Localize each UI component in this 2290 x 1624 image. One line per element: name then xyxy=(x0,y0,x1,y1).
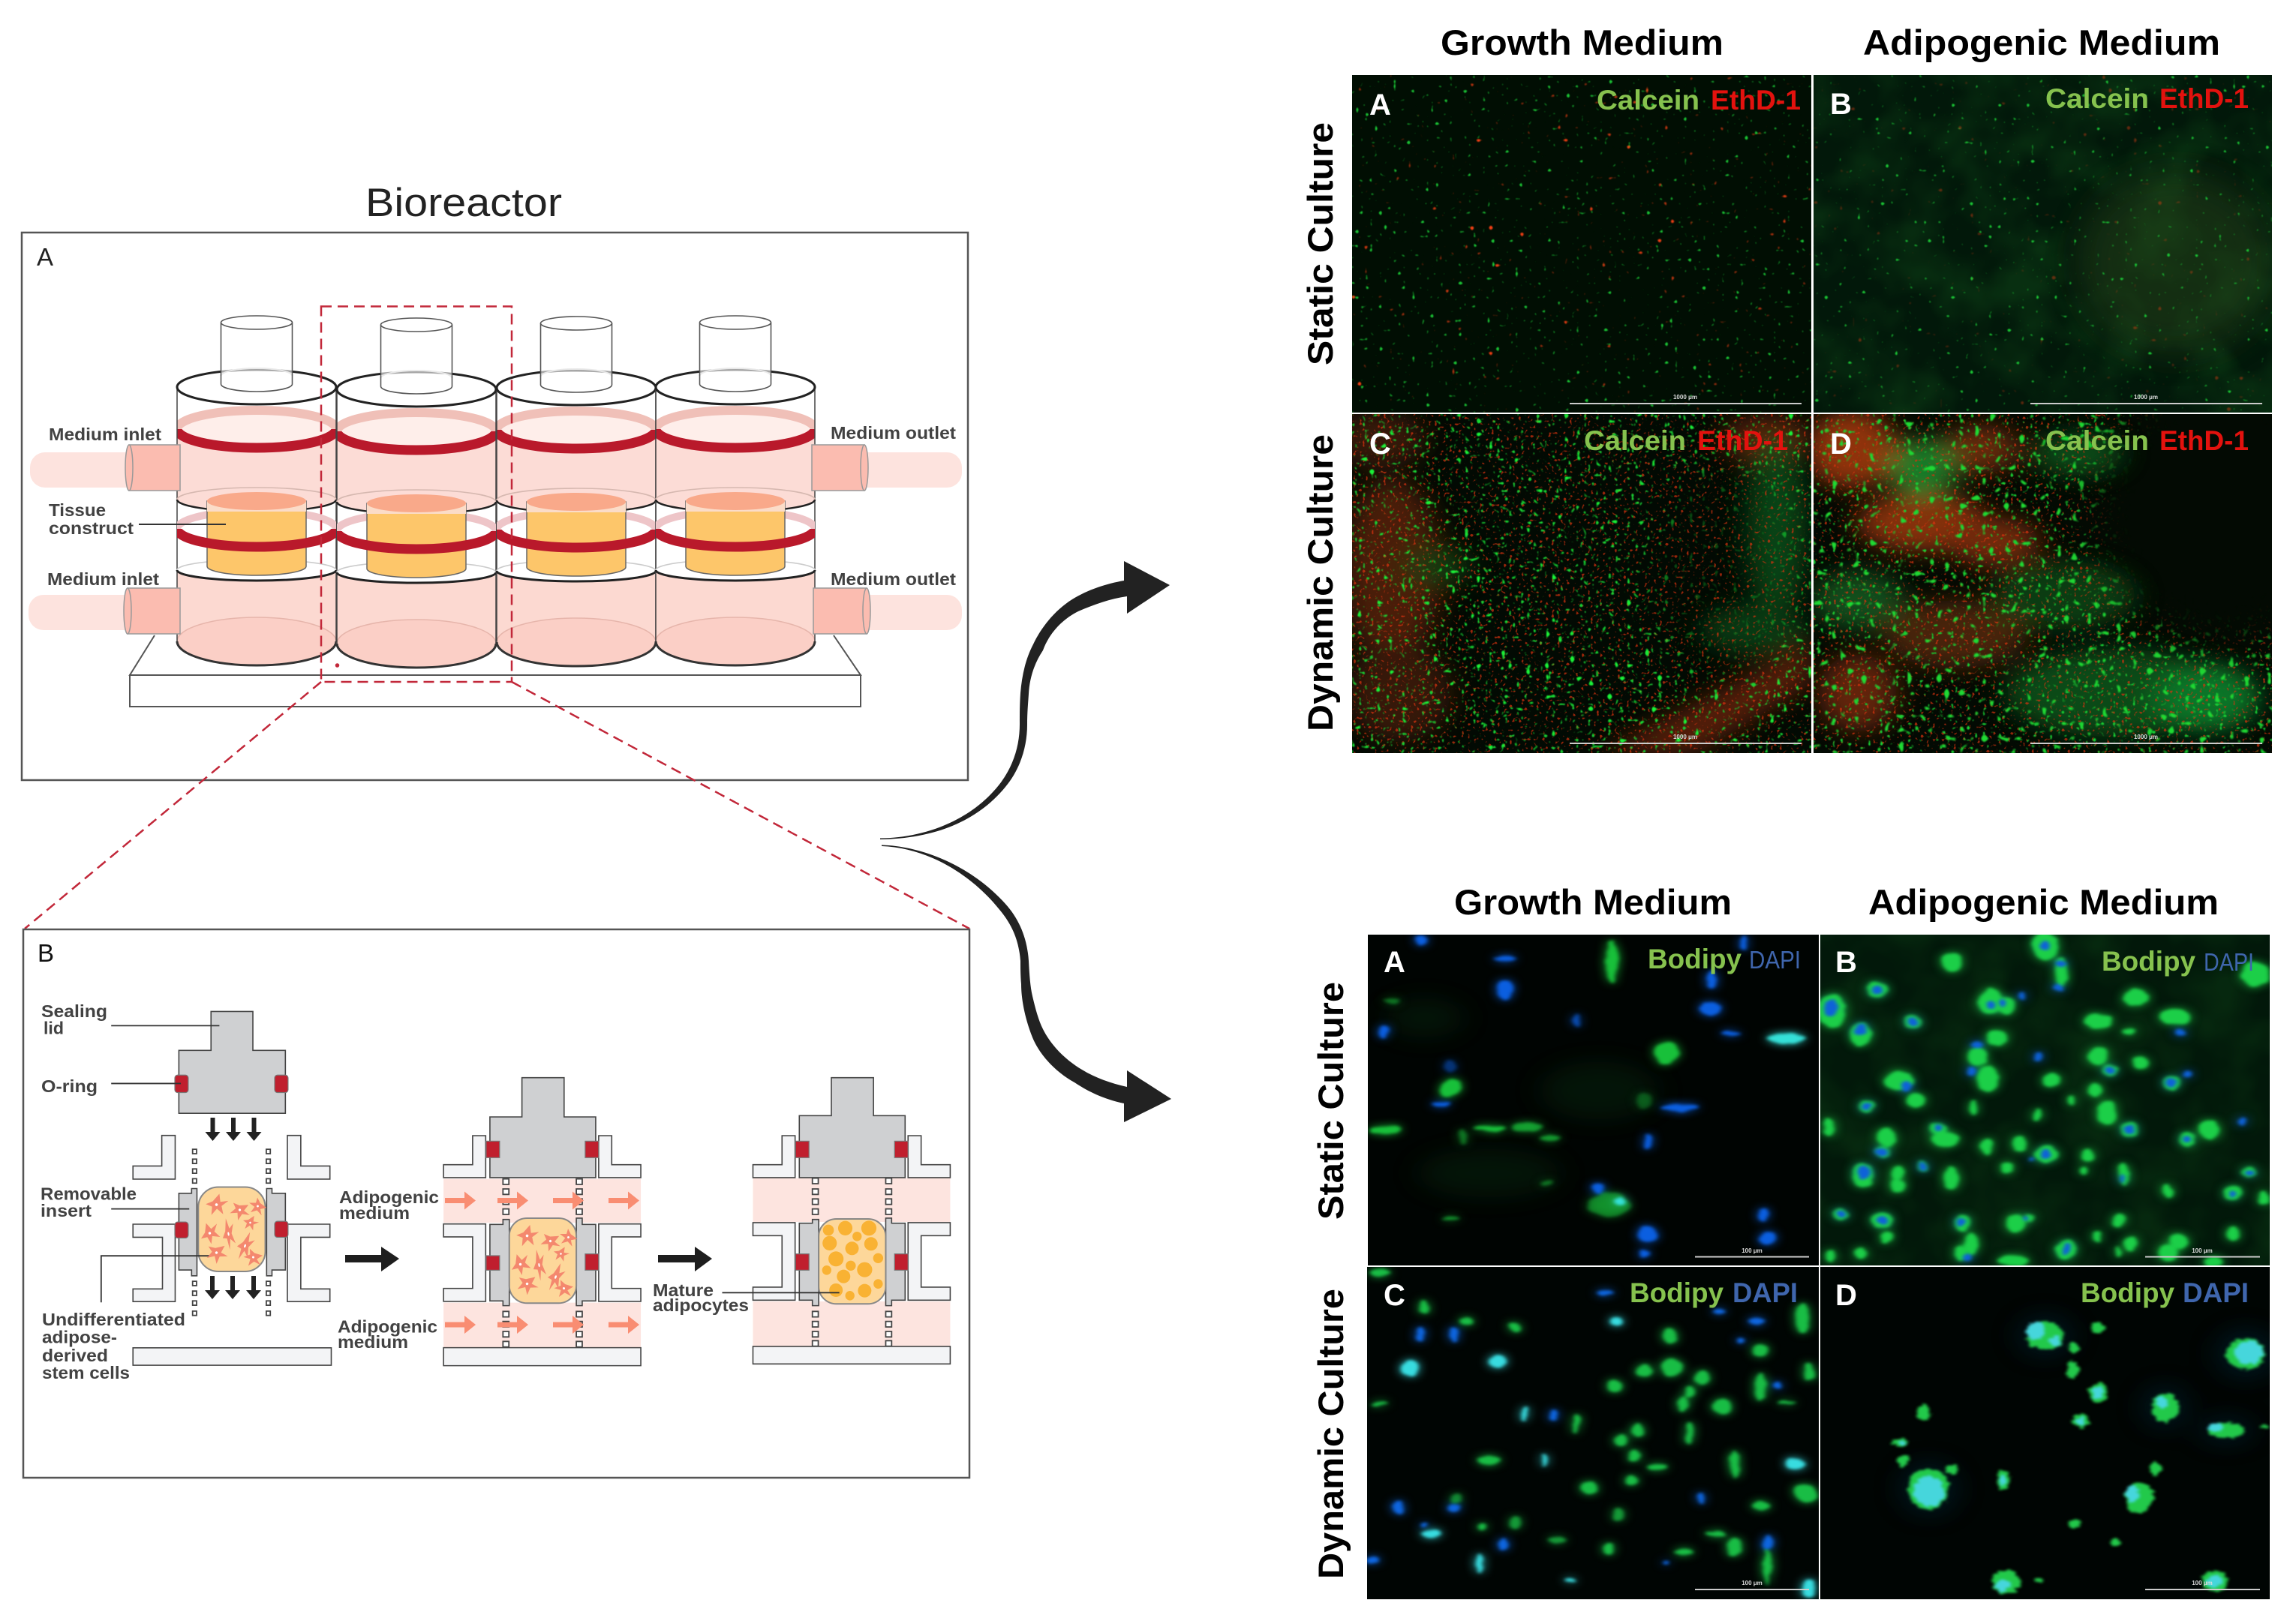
label: mature adipocytes xyxy=(653,1280,749,1315)
micrograph A: static growth medium, calcein/EthD-1: A xyxy=(1369,89,1391,122)
cylinder 1 xyxy=(177,316,336,665)
micrograph D: dynamic adipogenic medium, calcein/EthD-1: 1000 μm xyxy=(2134,734,2158,740)
panel B: construct stages xyxy=(23,929,969,1478)
micrograph A: static growth medium, calcein/EthD-1: Calcein xyxy=(1597,85,1699,116)
base plate xyxy=(130,635,861,707)
label: mature adipocytes: Mature xyxy=(653,1280,714,1300)
micrograph C: dynamic growth medium, Bodipy/DAPI: 100 μm xyxy=(1742,1580,1763,1586)
label: medium outlet lower: Medium outlet xyxy=(831,569,956,589)
label: medium outlet upper: Medium outlet xyxy=(831,423,956,443)
label: medium inlet lower: Medium inlet xyxy=(47,569,159,589)
labels stage 1: Removable xyxy=(41,1184,137,1203)
labels stage 1: Sealing xyxy=(41,1001,107,1021)
labels stage 1: O-ring xyxy=(41,1076,98,1096)
micrograph B: static adipogenic medium, calcein/EthD-1: B xyxy=(1830,88,1852,121)
micrograph B: static adipogenic medium, calcein/EthD-1: EthD-1 xyxy=(2159,83,2249,114)
micrograph A: static growth medium, Bodipy/DAPI xyxy=(1368,935,1819,1265)
panel A: bioreactor array xyxy=(22,233,968,780)
label: adipogenic medium lower: medium xyxy=(338,1332,408,1352)
micrograph D: dynamic adipogenic medium, Bodipy/DAPI xyxy=(1820,1267,2273,1599)
labels stage 1 xyxy=(41,1001,185,1382)
row label: static culture (live/dead): Static Culture xyxy=(1300,122,1340,365)
micrograph C: dynamic growth medium, Bodipy/DAPI: DAPI xyxy=(1733,1277,1798,1308)
labels stage 1: adipose- xyxy=(42,1328,117,1347)
label: medium inlet upper: Medium inlet xyxy=(49,425,161,444)
row label: dynamic culture (Bodipy): Dynamic Culture xyxy=(1311,1289,1351,1579)
inlet and outlet ports xyxy=(124,445,870,634)
micrograph A: static growth medium, calcein/EthD-1: 1000 μm xyxy=(1673,394,1697,401)
micrograph C: dynamic growth medium, calcein/EthD-1: C xyxy=(1369,428,1391,461)
label: tissue construct: construct xyxy=(49,518,134,538)
micrograph C: dynamic growth medium, Bodipy/DAPI: C xyxy=(1384,1279,1405,1312)
micrograph A: static growth medium, Bodipy/DAPI: Bodipy xyxy=(1648,944,1742,974)
micrograph B: static adipogenic medium, calcein/EthD-1 xyxy=(1814,75,2273,413)
micrograph A: static growth medium, Bodipy/DAPI: DAPI xyxy=(1749,946,1801,974)
micrograph D: dynamic adipogenic medium, Bodipy/DAPI: DAPI xyxy=(2183,1277,2249,1308)
stage 3: mature adipocytes xyxy=(722,1078,950,1364)
micrograph A: static growth medium, calcein/EthD-1 xyxy=(1352,75,1811,413)
micrograph A: static growth medium, Bodipy/DAPI: 100 μm xyxy=(1742,1247,1763,1254)
labels stage 1: stem cells xyxy=(42,1363,130,1382)
row label: dynamic culture (live/dead): Dynamic Culture xyxy=(1300,434,1340,731)
medium tubes xyxy=(29,452,962,630)
micrograph B: static adipogenic medium, Bodipy/DAPI: DAPI xyxy=(2204,948,2254,976)
dashed zoom selection xyxy=(25,306,969,929)
stage 1: assembly xyxy=(101,1011,331,1365)
micrograph A: static growth medium, Bodipy/DAPI: A xyxy=(1384,946,1405,979)
micrograph B: static adipogenic medium, Bodipy/DAPI xyxy=(1819,932,2270,1266)
label: adipogenic medium lower xyxy=(338,1317,437,1352)
micrograph C: dynamic growth medium, calcein/EthD-1: EthD-1 xyxy=(1697,425,1788,456)
micrograph C: dynamic growth medium, Bodipy/DAPI: Bodipy xyxy=(1630,1277,1724,1308)
label: adipogenic medium upper: medium xyxy=(339,1203,410,1223)
micrograph B: static adipogenic medium, Bodipy/DAPI: Bodipy xyxy=(2102,946,2195,977)
label: tissue construct: Tissue xyxy=(49,500,106,520)
heading: adipogenic medium (live/dead): Adipogenic Medium xyxy=(1863,23,2220,62)
micrograph C: dynamic growth medium, calcein/EthD-1: Calcein xyxy=(1584,425,1686,456)
cylinder 4 xyxy=(656,316,815,665)
micrograph D: dynamic adipogenic medium, Bodipy/DAPI: Bodipy xyxy=(2081,1277,2174,1308)
arrow: upward curved to live/dead images xyxy=(880,561,1170,839)
arrow: downward curved to Bodipy images xyxy=(882,845,1171,1122)
label: adipogenic medium lower: Adipogenic xyxy=(338,1317,437,1337)
label: adipogenic medium upper xyxy=(339,1187,439,1223)
stage 2: adipogenic perfusion xyxy=(443,1078,641,1366)
label: tissue construct xyxy=(49,500,226,538)
micrograph B: static adipogenic medium, calcein/EthD-1: Calcein xyxy=(2045,83,2149,114)
heading: growth medium (live/dead): Growth Medium xyxy=(1441,23,1724,62)
micrograph B: static adipogenic medium, Bodipy/DAPI: B xyxy=(1835,946,1857,979)
label: adipogenic medium upper: Adipogenic xyxy=(339,1187,439,1207)
heading: adipogenic medium (Bodipy): Adipogenic Medium xyxy=(1868,882,2219,922)
label: mature adipocytes: adipocytes xyxy=(653,1295,749,1315)
labels stage 1: insert xyxy=(41,1201,92,1220)
cylinder 2 xyxy=(337,318,496,668)
micrograph D: dynamic adipogenic medium, Bodipy/DAPI: 100 μm xyxy=(2192,1580,2213,1586)
micrograph D: dynamic adipogenic medium, Bodipy/DAPI: D xyxy=(1835,1279,1857,1312)
row label: static culture (Bodipy): Static Culture xyxy=(1311,982,1351,1220)
micrograph C: dynamic growth medium, calcein/EthD-1 xyxy=(1334,410,1812,754)
micrograph D: dynamic adipogenic medium, calcein/EthD-1 xyxy=(1806,410,2272,753)
micrograph D: dynamic adipogenic medium, calcein/EthD-1: D xyxy=(1830,428,1852,461)
micrograph C: dynamic growth medium, Bodipy/DAPI xyxy=(1366,1267,1819,1599)
cylinder 3 xyxy=(497,317,656,666)
micrograph C: dynamic growth medium, calcein/EthD-1: 1000 μm xyxy=(1673,734,1697,740)
labels stage 1: derived xyxy=(42,1346,108,1365)
micrograph B: static adipogenic medium, Bodipy/DAPI: 100 μm xyxy=(2192,1247,2213,1254)
heading: growth medium (Bodipy): Growth Medium xyxy=(1454,882,1732,922)
micrograph D: dynamic adipogenic medium, calcein/EthD-1: Calcein xyxy=(2045,425,2149,456)
labels stage 1: Undifferentiated xyxy=(42,1310,185,1329)
micrograph A: static growth medium, calcein/EthD-1: EthD-1 xyxy=(1711,85,1801,116)
title: Bioreactor: Bioreactor xyxy=(365,181,562,225)
panel letter A: A xyxy=(37,243,53,271)
panel letter B: B xyxy=(38,939,54,967)
arrow: stage 1 to 2 xyxy=(345,1247,399,1271)
arrow: stage 2 to 3 xyxy=(658,1247,712,1271)
micrograph D: dynamic adipogenic medium, calcein/EthD-1: EthD-1 xyxy=(2159,425,2249,456)
micrograph B: static adipogenic medium, calcein/EthD-1: 1000 μm xyxy=(2134,394,2158,401)
labels stage 1: lid xyxy=(44,1019,64,1038)
